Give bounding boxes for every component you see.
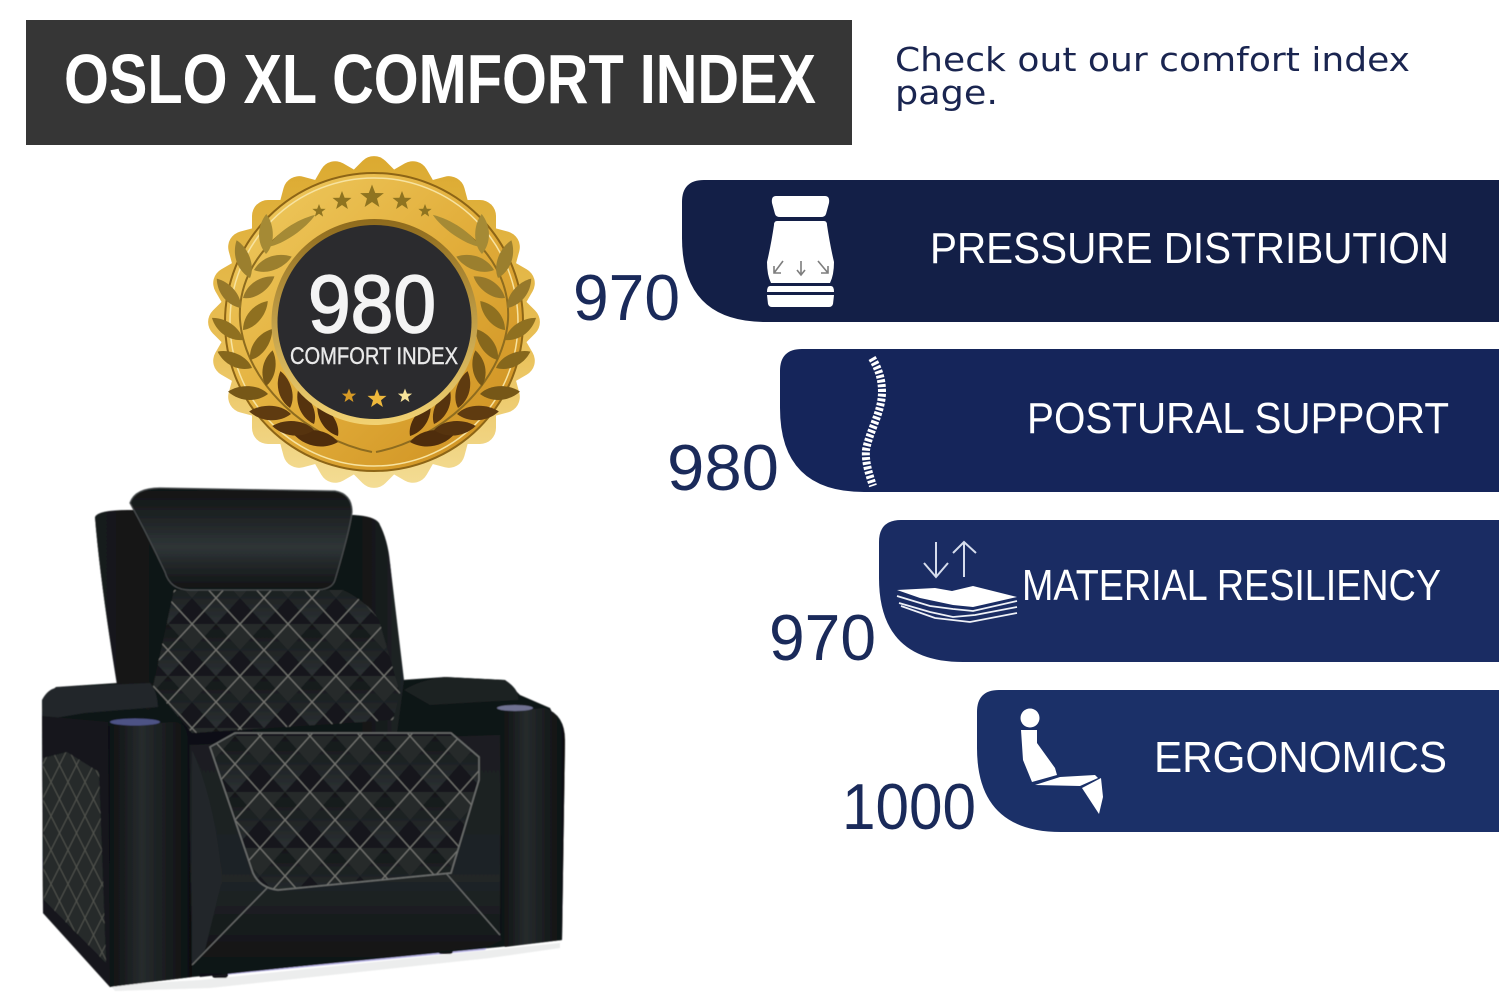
quilted backrest xyxy=(153,590,400,733)
icon: seated ergonomic figure xyxy=(1020,708,1103,814)
left arm side xyxy=(42,716,110,987)
icon: mattress pressure xyxy=(767,196,834,307)
label: MATERIAL RESILIENCY xyxy=(1022,562,1441,610)
feet xyxy=(212,965,228,978)
laurel wreath left xyxy=(209,211,372,452)
badge top stars xyxy=(312,184,432,217)
headrest xyxy=(130,488,352,590)
right arm xyxy=(500,708,565,947)
badge scalloped edge xyxy=(200,150,548,495)
score: material resiliency: 970 xyxy=(769,601,876,674)
icon: spine xyxy=(866,358,882,486)
bar: postural support xyxy=(780,349,1499,492)
chair silhouette xyxy=(42,510,565,987)
bar: ergonomics xyxy=(977,690,1499,832)
bar: material resiliency xyxy=(879,520,1499,662)
badge caption: COMFORT INDEX xyxy=(290,343,458,370)
laurel wreath right xyxy=(376,211,539,452)
badge score: 980 xyxy=(308,259,436,350)
floor shadow and glow xyxy=(110,943,560,991)
label: PRESSURE DISTRIBUTION xyxy=(930,225,1449,273)
comfort index badge xyxy=(200,150,548,495)
label: POSTURAL SUPPORT xyxy=(1027,395,1449,443)
label: ERGONOMICS xyxy=(1154,734,1447,782)
left arm front xyxy=(108,722,192,987)
recliner chair photo illustration xyxy=(42,488,565,991)
title banner xyxy=(26,20,852,145)
badge bottom stars xyxy=(342,388,356,402)
chair base xyxy=(190,735,502,977)
left armrest pad xyxy=(42,683,158,720)
quilted seat cushion xyxy=(210,733,479,890)
intro text xyxy=(895,40,1410,112)
score: pressure distribution: 970 xyxy=(573,261,680,334)
intro text: Check out our comfort index xyxy=(895,40,1410,79)
intro text: page. xyxy=(895,73,998,112)
score: postural support: 980 xyxy=(667,431,779,504)
bar: pressure distribution xyxy=(682,180,1499,322)
badge gold ring xyxy=(225,173,523,471)
score: ergonomics: 1000 xyxy=(842,770,976,843)
title banner: OSLO XL COMFORT INDEX xyxy=(64,40,816,118)
right armrest pad xyxy=(404,677,518,705)
icon: material layers xyxy=(897,542,1017,622)
chair back xyxy=(95,510,404,745)
badge inner disc xyxy=(272,219,478,425)
